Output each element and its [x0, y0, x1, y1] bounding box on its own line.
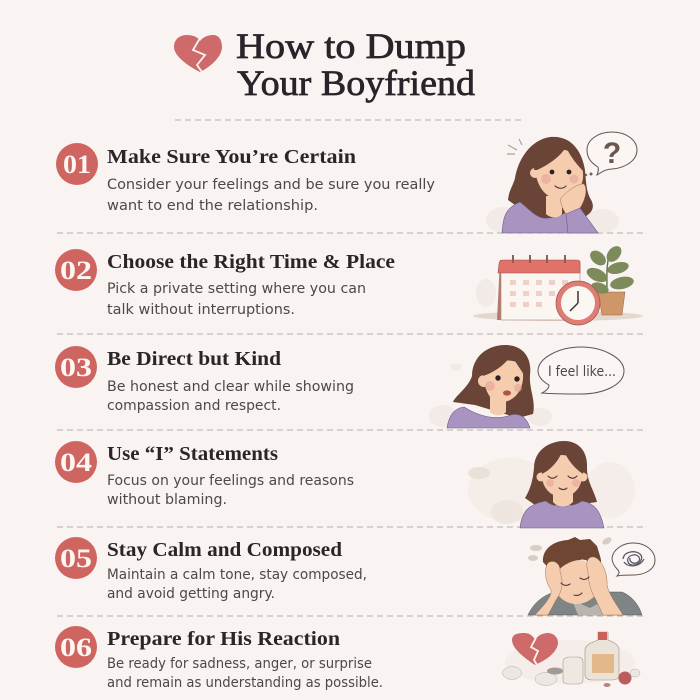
thought bubble with scribble	[612, 543, 655, 576]
number badge 06	[55, 626, 97, 668]
description 01: Consider your feelings and be sure you really	[107, 177, 435, 193]
description 05: and avoid getting angry.	[107, 586, 275, 602]
description 03	[107, 379, 354, 414]
heading 01: Make Sure You’re Certain	[107, 146, 356, 168]
illustration: girl speaking	[429, 345, 624, 428]
step 1	[56, 143, 435, 214]
thought bubble	[585, 132, 637, 176]
clock	[556, 281, 600, 325]
description 06	[107, 656, 383, 691]
number badge 04: 04	[60, 448, 92, 477]
description 02: talk without interruptions.	[107, 302, 295, 318]
number badge 05	[55, 537, 97, 579]
title: How to Dump	[236, 26, 466, 66]
title	[236, 26, 475, 103]
number badge 01: 01	[63, 150, 91, 179]
thought bubble: ?	[603, 137, 621, 170]
illustration: stressed boy	[528, 536, 655, 615]
calendar	[497, 255, 580, 320]
description 06: Be ready for sadness, anger, or surprise	[107, 656, 372, 672]
number badge 05: 05	[60, 544, 92, 573]
heading 05: Stay Calm and Composed	[107, 539, 342, 561]
description 04	[107, 473, 354, 508]
heading 03: Be Direct but Kind	[107, 348, 281, 370]
description 05	[107, 567, 367, 602]
stones and pills	[502, 666, 640, 687]
description 04: without blaming.	[107, 492, 227, 508]
bottle	[585, 632, 619, 680]
number badge 02	[55, 249, 97, 291]
heading 04: Use “I” Statements	[107, 443, 278, 465]
step 6	[55, 626, 383, 691]
number badge 04	[55, 441, 97, 483]
description 03: Be honest and clear while showing	[107, 379, 354, 395]
number badge 06: 06	[60, 633, 92, 662]
heading 02: Choose the Right Time & Place	[107, 251, 395, 273]
plant	[584, 243, 635, 315]
illustration: thinking girl	[486, 132, 637, 233]
description 01	[107, 177, 435, 214]
illustration: girl with eyes closed	[468, 441, 635, 528]
step 5	[55, 537, 367, 602]
description 05: Maintain a calm tone, stay composed,	[107, 567, 367, 583]
heading 06: Prepare for His Reaction	[107, 628, 340, 650]
icon: broken heart	[174, 35, 222, 72]
number badge 02: 02	[60, 256, 92, 285]
description 01: want to end the relationship.	[107, 198, 318, 214]
illustration: calendar, clock and plant	[473, 243, 643, 325]
description 06: and remain as understanding as possible.	[107, 675, 383, 691]
number badge 03: 03	[60, 353, 92, 382]
description 02: Pick a private setting where you can	[107, 281, 366, 297]
number badge 03	[55, 346, 97, 388]
title: Your Boyfriend	[237, 63, 475, 103]
step 2	[55, 249, 395, 318]
illustration: broken heart, bottle and stones	[502, 632, 640, 687]
description 02	[107, 281, 366, 318]
step 4	[55, 441, 354, 508]
step 3	[55, 346, 354, 414]
description 03: compassion and respect.	[107, 398, 281, 414]
number badge 01	[56, 143, 98, 185]
speech bubble	[538, 347, 624, 394]
speech bubble: I feel like...	[548, 364, 616, 380]
description 04: Focus on your feelings and reasons	[107, 473, 354, 489]
small broken heart	[512, 633, 558, 665]
jar	[563, 657, 583, 684]
